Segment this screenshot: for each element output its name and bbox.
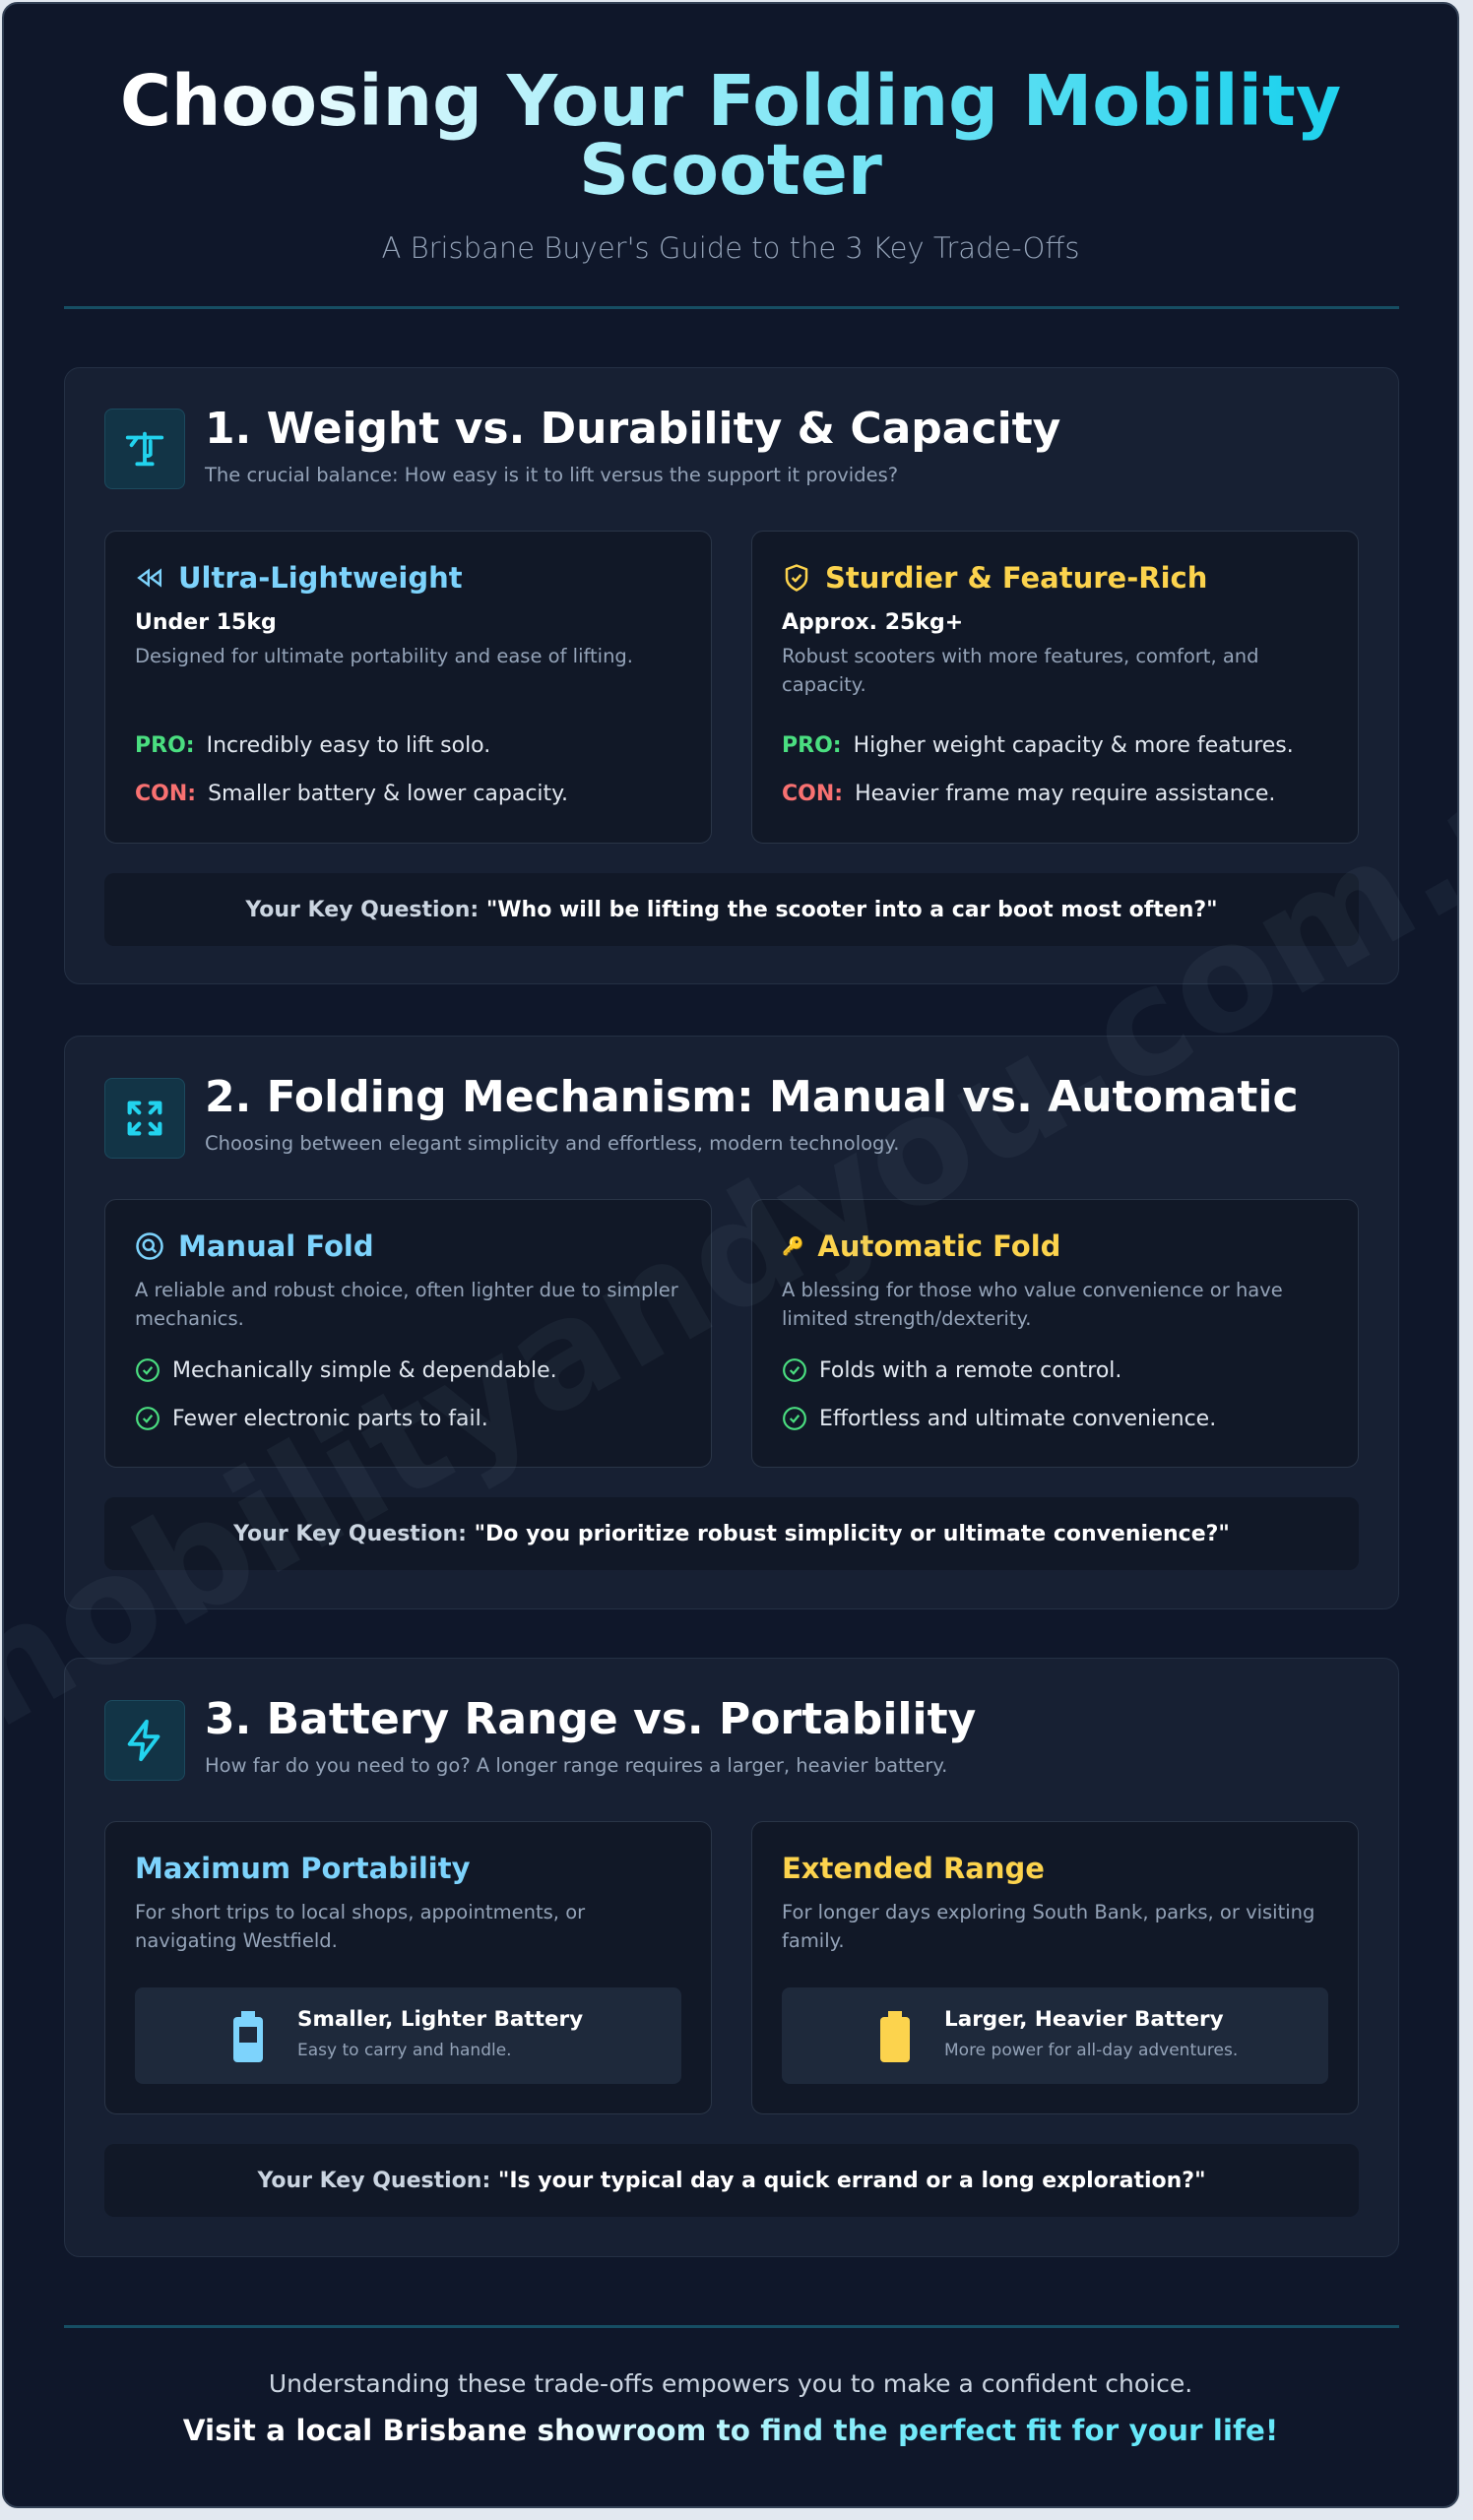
con: Heavier frame may require assistance. (855, 782, 1275, 806)
footer call to action: Visit a local Brisbane showroom to find the perfect fit for your life! (183, 2414, 1278, 2447)
subheading: The crucial balance: How easy is it to lift versus the support it provides? (205, 464, 898, 486)
card: ultra-lightweight: Under 15kg (135, 610, 277, 635)
icon: lightning (104, 1700, 185, 1781)
key question (104, 2144, 1359, 2217)
con: CON: (782, 782, 843, 806)
card: maximum portability (104, 1821, 712, 2114)
card title: 🔑 (782, 1236, 803, 1256)
key question: "Do you prioritize robust simplicity or ultimate convenience?" (475, 1522, 1230, 1545)
pro: PRO: (782, 733, 842, 758)
card: manual fold: A reliable and robust choice, often lighter due to simpler mechanics. (135, 1279, 678, 1330)
card: extended range: For longer days exploring South Bank, parks, or visiting family. (782, 1901, 1314, 1952)
card: automatic fold (751, 1199, 1359, 1468)
battery box: More power for all-day adventures. (944, 2041, 1238, 2060)
check item: Fewer electronic parts to fail. (172, 1406, 488, 1431)
battery box: Smaller, Lighter Battery (297, 2007, 583, 2032)
key question: Your Key Question: (257, 2168, 490, 2193)
check item: Folds with a remote control. (819, 1358, 1121, 1382)
key question (104, 1497, 1359, 1570)
card: sturdier (751, 531, 1359, 844)
battery box: Larger, Heavier Battery (944, 2007, 1224, 2032)
icon: large battery (880, 2011, 910, 2062)
check item: Effortless and ultimate convenience. (819, 1406, 1216, 1431)
card: ultra-lightweight: Designed for ultimate portability and ease of lifting. (135, 645, 633, 667)
card: extended range (751, 1821, 1359, 2114)
footer text: Understanding these trade-offs empowers you to make a confident choice. (269, 2369, 1192, 2398)
icon: scale (104, 409, 185, 489)
card: sturdier: Robust scooters with more features, comfort, and capacity. (782, 645, 1259, 696)
key question (104, 873, 1359, 946)
card title: Sturdier & Feature-Rich (825, 561, 1207, 595)
card: automatic fold: A blessing for those who value convenience or have limited strength/dexterity. (782, 1279, 1283, 1330)
pro: Higher weight capacity & more features. (854, 733, 1294, 758)
icon: small battery (233, 2011, 263, 2062)
card title: Ultra-Lightweight (178, 561, 463, 595)
card title: Extended Range (782, 1852, 1045, 1885)
subheading: How far do you need to go? A longer range requires a larger, heavier battery. (205, 1754, 947, 1777)
pro: Incredibly easy to lift solo. (207, 733, 490, 758)
subheading: Choosing between elegant simplicity and effortless, modern technology. (205, 1132, 899, 1155)
card: maximum portability: For short trips to local shops, appointments, or navigating Westfield. (135, 1901, 585, 1952)
icon: expand arrows (104, 1078, 185, 1159)
pro: PRO: (135, 733, 195, 758)
battery box (782, 1987, 1328, 2084)
heading: 2. Folding Mechanism: Manual vs. Automatic (205, 1072, 1299, 1122)
con: Smaller battery & lower capacity. (208, 782, 568, 806)
card title: Manual Fold (178, 1229, 374, 1263)
subtitle: A Brisbane Buyer's Guide to the 3 Key Trade-Offs (382, 231, 1079, 265)
check item: Mechanically simple & dependable. (172, 1358, 557, 1382)
panel: battery range (64, 1658, 1399, 2257)
panel: folding mechanism (64, 1036, 1399, 1609)
card: manual fold (104, 1199, 712, 1468)
battery box: Easy to carry and handle. (297, 2041, 512, 2060)
key question: Your Key Question: (245, 898, 479, 921)
con: CON: (135, 782, 196, 806)
key question: "Is your typical day a quick errand or a long exploration?" (498, 2168, 1206, 2193)
heading: 1. Weight vs. Durability & Capacity (205, 404, 1060, 454)
card title: Automatic Fold (817, 1229, 1060, 1263)
card: sturdier: Approx. 25kg+ (782, 610, 963, 635)
panel: weight vs durability (64, 367, 1399, 984)
key question: Your Key Question: (233, 1522, 467, 1545)
key question: "Who will be lifting the scooter into a car boot most often?" (486, 898, 1218, 921)
card: ultra-lightweight (104, 531, 712, 844)
card title: Maximum Portability (135, 1852, 471, 1885)
battery box (135, 1987, 681, 2084)
heading: 3. Battery Range vs. Portability (205, 1694, 976, 1744)
title: Choosing Your Folding Mobility Scooter (120, 60, 1341, 211)
